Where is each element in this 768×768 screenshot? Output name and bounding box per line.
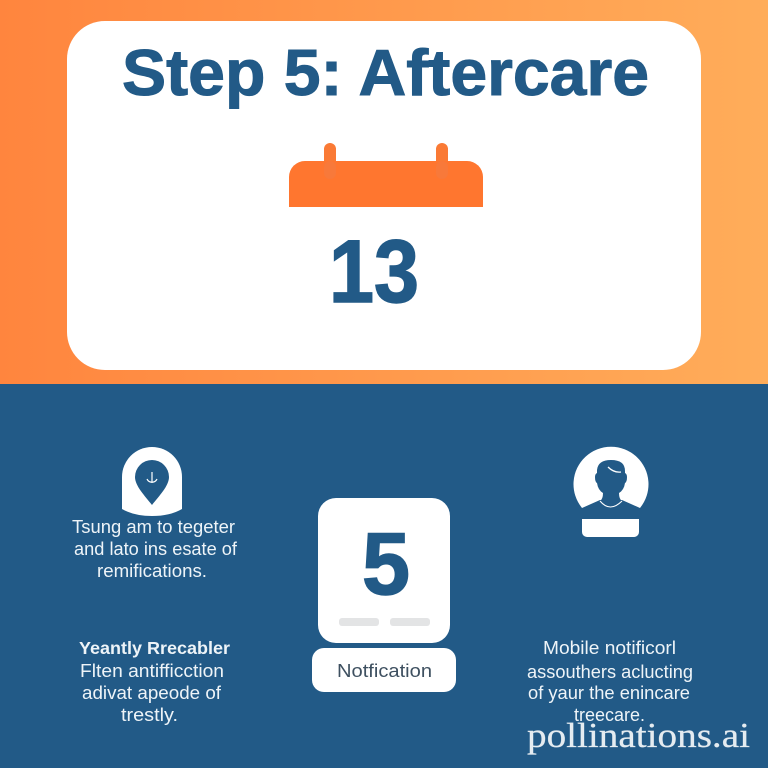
text block: left top: and lato ins esate of (74, 538, 238, 559)
text block: left bottom: adivat apeode of (82, 682, 222, 703)
number five: 5 (362, 514, 410, 613)
watermark: pollinations.ai (527, 716, 750, 755)
text block: left bottom: trestly. (121, 704, 178, 725)
icon: person badge (574, 447, 649, 537)
icon: calendar header (289, 143, 483, 207)
panel: orange header background (0, 0, 768, 384)
text block: left bottom: Yeantly Rrecabler (79, 638, 230, 658)
icon: location pin badge (122, 447, 182, 516)
title: Step 5: Aftercare (122, 36, 649, 109)
calendar date number: 13 (329, 221, 419, 321)
panel: white title card (67, 21, 701, 370)
text block: right: Mobile notificorl (543, 637, 676, 658)
panel: notification card (318, 498, 450, 643)
notification label pill (312, 648, 456, 692)
text block: right: of yaur the enincare (528, 682, 690, 703)
text block: left bottom (79, 638, 230, 725)
text block: right: treecare. (574, 704, 645, 725)
text block: left bottom: Flten antifficction (80, 660, 224, 681)
text block: left top (72, 516, 238, 581)
notification label pill: Notfication (337, 661, 432, 681)
text block: left top: Tsung am to tegeter (72, 516, 235, 537)
text block: right: assouthers aclucting (527, 661, 693, 682)
placeholder bars (339, 618, 430, 626)
panel: blue lower background (0, 384, 768, 768)
text block: right (527, 637, 693, 725)
text block: left top: remifications. (97, 560, 207, 581)
